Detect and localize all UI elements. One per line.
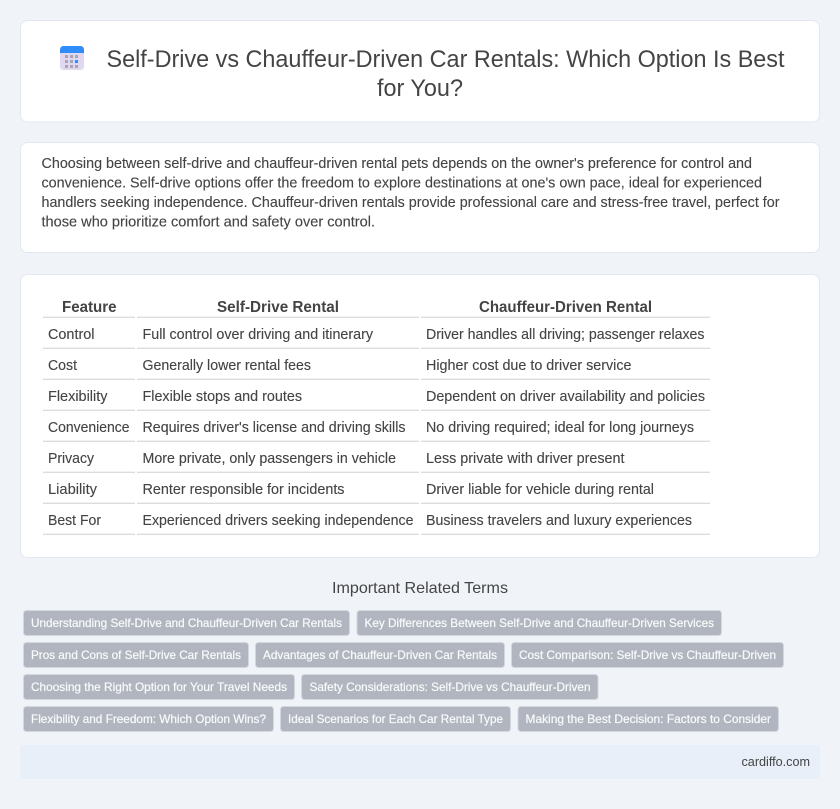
table row: control <box>48 327 704 343</box>
table row: flexibility: Flexible stops and routes <box>142 389 302 405</box>
tag: Making the Best Decision: Factors to Consider <box>526 712 771 726</box>
tag: Cost Comparison: Self-Drive vs Chauffeur-Driven <box>519 648 776 662</box>
table row: liability: Liability <box>48 482 98 498</box>
intro text: Choosing between self-drive and chauffeur-driven rental pets depends on the owner's preference for control and <box>42 156 752 172</box>
tag <box>302 674 598 700</box>
icon: calendar <box>60 46 84 70</box>
tag: Key Differences Between Self-Drive and Chauffeur-Driven Services <box>364 616 714 630</box>
tag: Pros and Cons of Self-Drive Car Rentals <box>31 648 241 662</box>
table row: cost <box>48 358 632 374</box>
tag: Ideal Scenarios for Each Car Rental Type <box>288 712 503 726</box>
intro text: handlers seeking independence. Chauffeur-driven rentals provide professional care and stress-free travel, perfect for <box>42 195 780 211</box>
table row: control: Driver handles all driving; passenger relaxes <box>426 327 704 343</box>
table row: convenience: No driving required; ideal for long journeys <box>426 420 694 436</box>
title: Self-Drive vs Chauffeur-Driven Car Rentals: Which Option Is Best <box>106 46 785 73</box>
table row: best for: Business travelers and luxury experiences <box>426 513 692 529</box>
tag: Choosing the Right Option for Your Travel Needs <box>31 680 287 694</box>
table row: privacy: More private, only passengers in vehicle <box>142 451 396 467</box>
table row: cost: Higher cost due to driver service <box>426 358 632 374</box>
footer bar <box>20 745 820 779</box>
tag <box>357 610 722 636</box>
table row: liability: Renter responsible for incidents <box>142 482 344 498</box>
tag <box>512 642 784 668</box>
table row: privacy: Less private with driver present <box>426 451 624 467</box>
footer text: cardiffo.com <box>742 755 810 769</box>
tag <box>256 642 504 668</box>
table header: Feature <box>62 299 117 316</box>
title <box>106 46 785 102</box>
intro text: convenience. Self-drive options offer the freedom to explore destinations at one's own pace, ideal for experienced <box>42 176 762 192</box>
table header: Chauffeur-Driven Rental <box>479 299 652 316</box>
table row: best for <box>48 513 692 529</box>
tag <box>518 706 778 732</box>
table row: best for: Experienced drivers seeking independence <box>142 513 414 529</box>
table row: convenience <box>48 420 694 436</box>
tag <box>24 642 248 668</box>
table row: convenience: Requires driver's license and driving skills <box>142 420 406 436</box>
tag: Understanding Self-Drive and Chauffeur-Driven Car Rentals <box>31 616 342 630</box>
table row: flexibility: Flexibility <box>48 389 108 405</box>
panel: introduction <box>20 142 820 252</box>
tag <box>24 610 350 636</box>
panel: title card <box>20 20 820 122</box>
related term tags <box>24 610 784 732</box>
table row: cost: Generally lower rental fees <box>142 358 311 374</box>
tag <box>24 706 274 732</box>
table row: flexibility <box>48 389 705 405</box>
table row: privacy: Privacy <box>48 451 95 467</box>
tag: Advantages of Chauffeur-Driven Car Rentals <box>263 648 497 662</box>
table row: best for: Best For <box>48 513 101 529</box>
tag: Safety Considerations: Self-Drive vs Chauffeur-Driven <box>310 680 590 694</box>
tag <box>280 706 510 732</box>
table row: convenience: Convenience <box>48 420 130 436</box>
intro text: those who prioritize comfort and safety over control. <box>42 214 375 230</box>
table row: privacy <box>48 451 624 467</box>
intro text <box>42 156 780 230</box>
table header <box>62 299 652 316</box>
title: for You? <box>377 75 463 102</box>
table header: Self-Drive Rental <box>217 299 339 316</box>
table row: flexibility: Dependent on driver availability and policies <box>426 389 705 405</box>
table row: liability: Driver liable for vehicle during rental <box>426 482 654 498</box>
heading: related terms: Important Related Terms <box>332 580 508 597</box>
tag: Flexibility and Freedom: Which Option Wins? <box>31 712 266 726</box>
table row: cost: Cost <box>48 358 77 374</box>
table row: control: Control <box>48 327 94 343</box>
table row: liability <box>48 482 654 498</box>
panel: comparison table <box>20 274 820 558</box>
table row: control: Full control over driving and itinerary <box>142 327 374 343</box>
tag <box>24 674 294 700</box>
